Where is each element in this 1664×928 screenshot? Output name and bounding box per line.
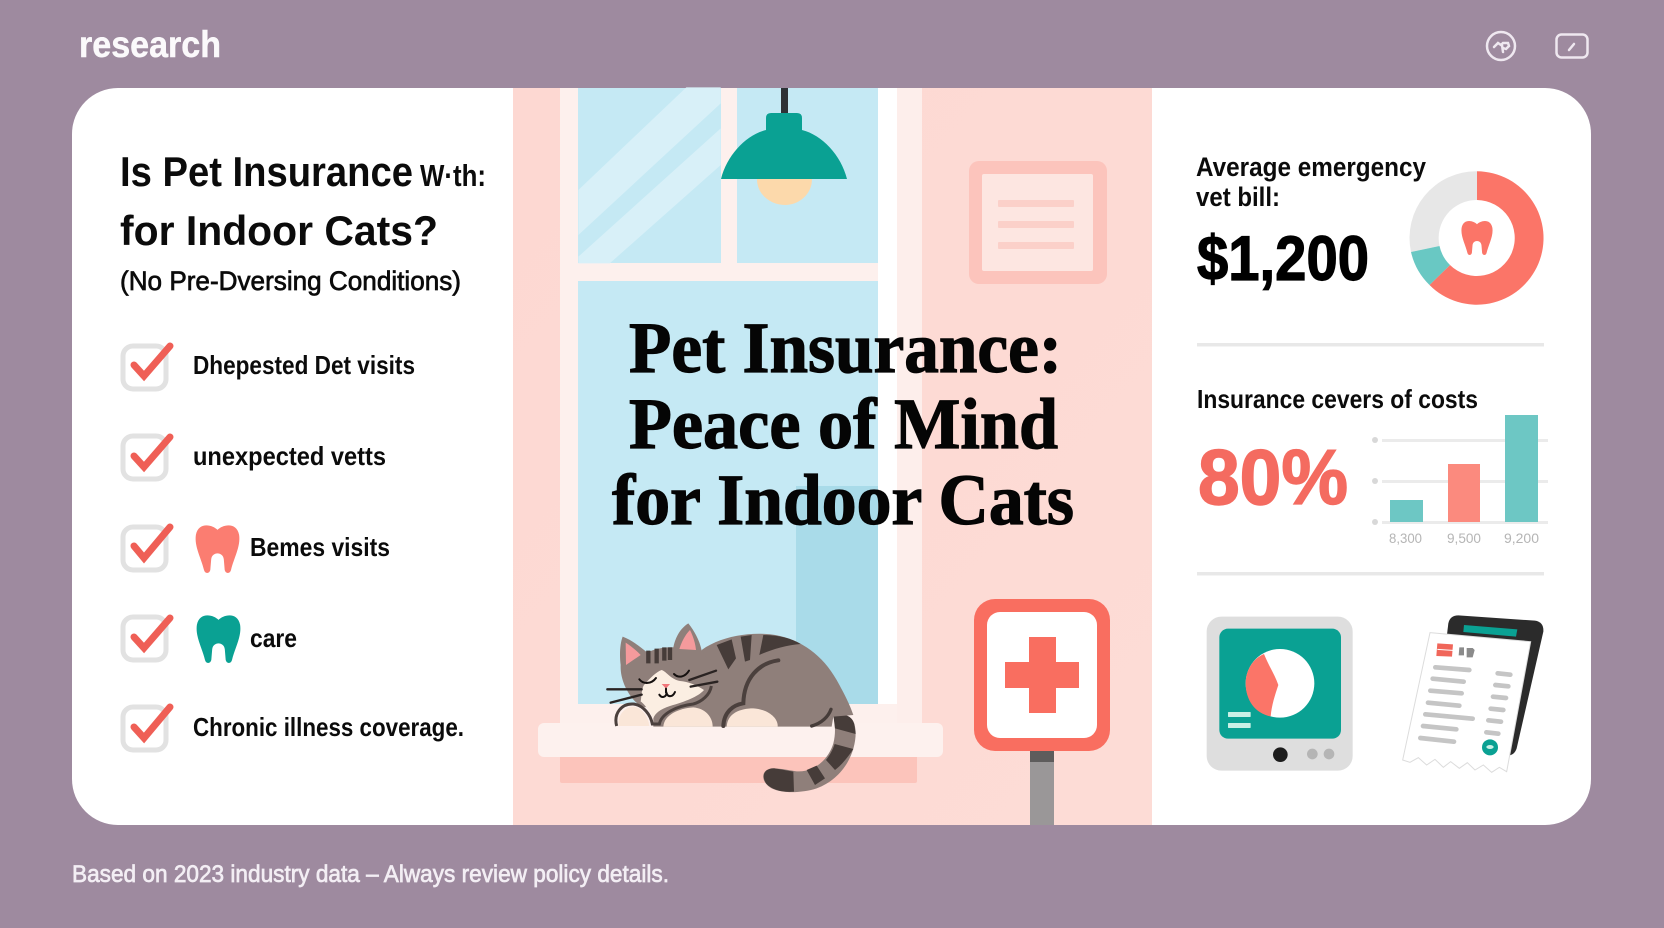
checklist row 2: unexpected vetts [193, 441, 386, 471]
main title [612, 308, 1074, 540]
icon: tooth in donut [1461, 221, 1493, 255]
cat head [620, 623, 710, 708]
panel: checklist heading [120, 148, 486, 296]
checklist row 1 [123, 346, 415, 389]
checklist row 3: Bemes visits [250, 532, 390, 562]
header icons [1487, 32, 1588, 60]
icon: vet monitor [1207, 617, 1353, 771]
checklist row 5: Chronic illness coverage. [193, 712, 464, 742]
window sill [538, 723, 943, 783]
panel: checklist heading: Is Pet Insurance [120, 148, 413, 195]
icon: teal tooth [197, 615, 240, 663]
panel: coverage stat [1197, 384, 1548, 546]
pendant lamp [721, 88, 847, 205]
panel: checklist heading: W·th: [420, 158, 486, 193]
bar chart: 9,500 [1447, 530, 1481, 546]
room wall [513, 88, 1152, 825]
checklist row 2 [123, 436, 386, 479]
panel: coverage stat: Insurance cevers of costs [1197, 384, 1478, 414]
panel: emergency bill stat: Average emergency [1196, 152, 1426, 182]
panel: emergency bill stat: $1,200 [1197, 224, 1369, 294]
sleeping cat [607, 623, 856, 792]
checklist row 4 [123, 615, 297, 663]
bar chart: 8,300 [1389, 530, 1422, 546]
checklist row 5 [123, 707, 464, 750]
main card [72, 88, 1591, 825]
panel: emergency bill stat [1196, 152, 1544, 305]
icon: coral tooth [196, 525, 239, 573]
wall frame [969, 161, 1107, 284]
footer note: Based on 2023 industry data – Always review policy details. [72, 861, 669, 888]
checklist row 1: Dhepested Det visits [193, 350, 415, 380]
cat tail [763, 714, 856, 792]
checklist row 3 [123, 525, 390, 573]
panel: illustrated room scene [513, 87, 1152, 825]
panel: checklist heading: for Indoor Cats? [120, 207, 438, 254]
main title: for Indoor Cats [612, 460, 1074, 540]
medical cross sign [974, 599, 1110, 825]
brand wordmark: research [79, 24, 221, 65]
checklist row 4: care [250, 623, 297, 653]
cat paws [727, 708, 778, 727]
panel: coverage stat: 80% [1198, 433, 1348, 521]
panel: checklist [123, 346, 464, 750]
donut chart [1410, 171, 1544, 305]
main title: Pet Insurance: [629, 308, 1062, 388]
icon: clipboard and receipt [1403, 615, 1543, 772]
panel: checklist heading: (No Pre-Dversing Conditions) [120, 266, 461, 296]
main title: Peace of Mind [629, 384, 1058, 464]
panel: emergency bill stat: vet bill: [1196, 182, 1280, 212]
bar chart: 9,200 [1504, 530, 1539, 546]
window [560, 87, 922, 723]
bar chart [1372, 415, 1548, 546]
cat body [653, 634, 853, 727]
